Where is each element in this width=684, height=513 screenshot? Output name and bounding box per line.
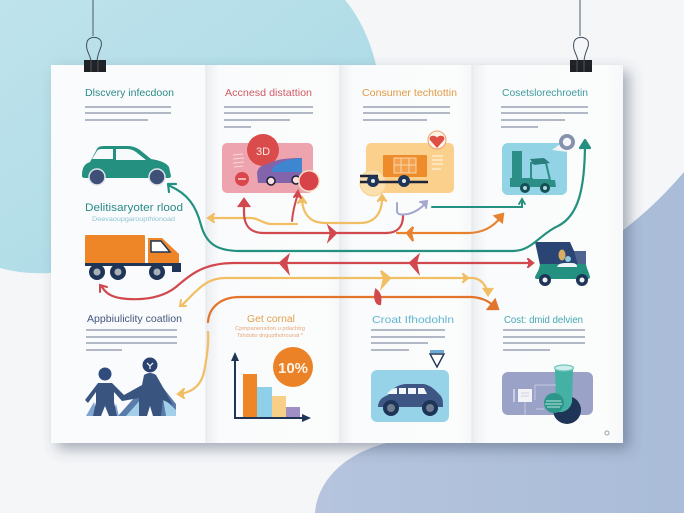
panel: forklift bbox=[502, 134, 575, 195]
caption: cost control: Cpmpanensdon u pdachtrg bbox=[235, 326, 305, 332]
caption: cost control bbox=[235, 326, 305, 339]
icon: orange truck bbox=[85, 235, 181, 280]
heading: column 3 bottom: Croat Ifhodohln bbox=[372, 314, 454, 326]
heading: top column 4: Cosetslorechroetin bbox=[502, 87, 588, 99]
icon: two people bbox=[85, 358, 176, 416]
arrow: yellow long bbox=[180, 271, 492, 306]
arrow: red long bbox=[100, 256, 533, 299]
arrow: red upper loop bbox=[239, 199, 403, 240]
text lines: top columns bbox=[85, 107, 588, 127]
heading: delivery: Delitisaryoter rlood bbox=[85, 202, 183, 214]
heading: cost control: Get cornal bbox=[247, 314, 295, 325]
arrow: yellow left bbox=[208, 214, 297, 224]
heading: top column 2: Accnesd distattion bbox=[225, 87, 312, 99]
hanging clips bbox=[84, 0, 592, 72]
arrow: orange long bbox=[208, 290, 498, 322]
text lines: column 1 bottom bbox=[86, 330, 177, 350]
panel: purple device bbox=[502, 365, 593, 424]
panel: blue car bbox=[371, 370, 449, 422]
arrow: purple bbox=[397, 201, 427, 215]
panel: orange truck bbox=[360, 131, 454, 196]
panel: pink van: 3D bbox=[256, 146, 270, 158]
arrow: yellow to truck bbox=[298, 195, 386, 223]
icon: page mark bbox=[605, 431, 609, 435]
text lines: column 4 bottom bbox=[503, 330, 585, 350]
heading: column 4 bottom: Cost: dmid delvien bbox=[504, 314, 583, 326]
arrow: long teal flow bbox=[168, 140, 590, 251]
heading: top column 3: Consumer techtottin bbox=[362, 87, 457, 99]
text lines: column 3 bottom bbox=[371, 330, 445, 350]
arrow: short teal bbox=[432, 199, 525, 207]
brochure sheet bbox=[51, 65, 623, 443]
caption: delivery: Deevaoupgaroupthlonoad bbox=[92, 216, 175, 223]
icon: dark delivery truck bbox=[535, 242, 590, 286]
arrow: yellow down bbox=[178, 332, 208, 398]
arrow: red short bbox=[292, 191, 301, 221]
chart: bars with 10% badge bbox=[231, 347, 313, 422]
caption: cost control: Tshdutio dngupthotrounat * bbox=[237, 333, 304, 339]
heading: applicability: Appbiuliclity coatlion bbox=[87, 313, 182, 325]
icon: teal car bbox=[82, 146, 171, 185]
arrow: orange middle bbox=[397, 214, 503, 241]
heading: top column 1: Dlscvery infecdoon bbox=[85, 87, 174, 99]
panel: pink van bbox=[222, 134, 320, 193]
icon: funnel marker bbox=[430, 350, 444, 367]
chart: bars with 10% badge: 10% bbox=[278, 360, 308, 377]
